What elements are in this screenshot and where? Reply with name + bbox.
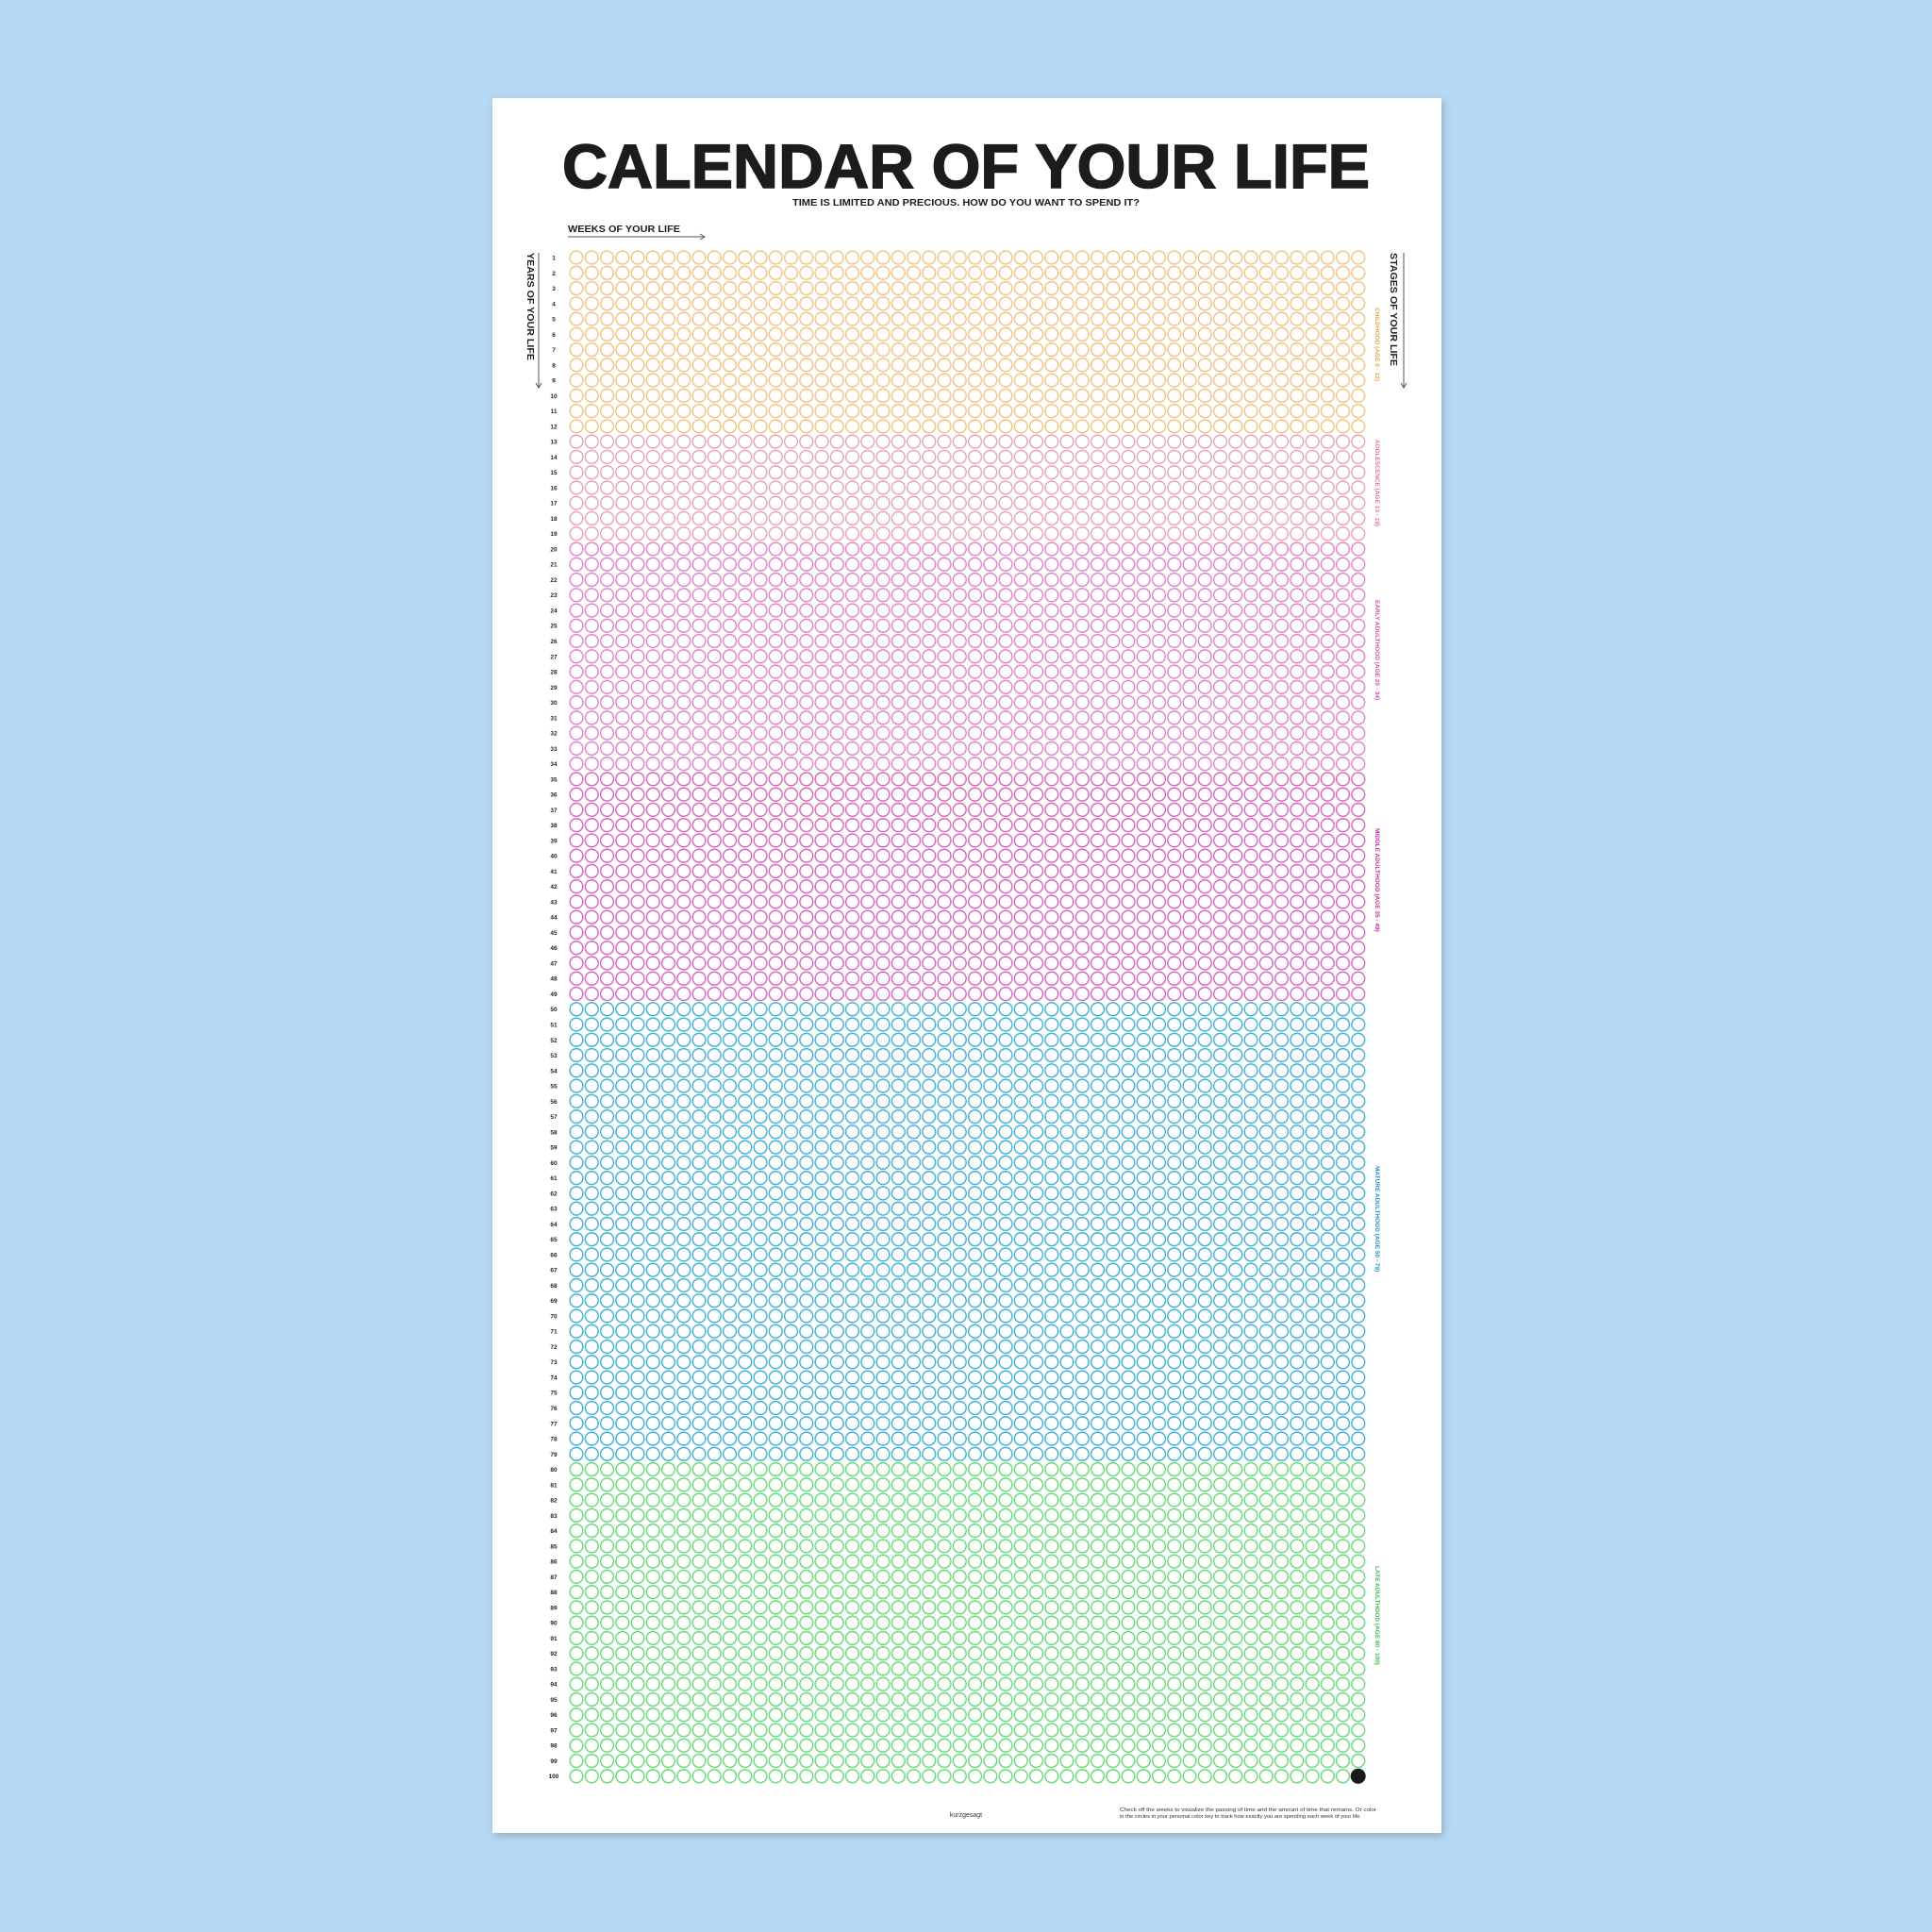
year numbers: 29 <box>550 685 558 691</box>
year numbers: 85 <box>550 1543 558 1550</box>
year numbers: 31 <box>550 715 558 722</box>
grid: late adulthood rows 80-100 <box>569 1461 1366 1784</box>
year numbers: 18 <box>550 516 558 523</box>
year numbers: 97 <box>550 1727 558 1734</box>
year numbers: 75 <box>550 1391 558 1397</box>
axis label: weeks <box>568 225 705 240</box>
year numbers: 46 <box>550 945 558 952</box>
year numbers: 70 <box>550 1313 558 1320</box>
year numbers: 20 <box>550 546 558 553</box>
year numbers: 81 <box>550 1482 558 1489</box>
year numbers: 90 <box>550 1621 558 1627</box>
year numbers: 5 <box>552 317 556 324</box>
year numbers: 23 <box>550 592 558 599</box>
year numbers: 61 <box>550 1175 558 1182</box>
year numbers: 79 <box>550 1452 558 1458</box>
year numbers: 39 <box>550 838 558 844</box>
year numbers: 47 <box>550 960 558 967</box>
axis label: years <box>525 253 541 388</box>
year numbers: 51 <box>550 1023 558 1029</box>
year numbers: 32 <box>550 731 558 738</box>
grid: middle adulthood rows 35-49 <box>569 772 1366 1002</box>
year numbers: 60 <box>550 1160 558 1167</box>
year numbers: 22 <box>550 577 558 584</box>
grid: mature adulthood rows 50-79 <box>569 1002 1366 1461</box>
year numbers: 10 <box>550 393 558 400</box>
year numbers: 11 <box>551 408 558 415</box>
year numbers: 21 <box>550 562 558 569</box>
year numbers: 24 <box>550 608 558 614</box>
year numbers: 45 <box>550 930 558 937</box>
year numbers: 93 <box>550 1666 558 1673</box>
year numbers: 40 <box>550 854 558 860</box>
year numbers: 89 <box>550 1605 558 1611</box>
year numbers: 26 <box>550 639 558 645</box>
axis label: stages: STAGES OF YOUR LIFE <box>1388 253 1398 366</box>
year numbers: 67 <box>550 1268 558 1274</box>
year numbers: 34 <box>550 761 558 768</box>
final week black dot <box>1351 1769 1366 1784</box>
year numbers: 44 <box>550 915 558 922</box>
year numbers: 64 <box>550 1222 558 1228</box>
year numbers: 27 <box>550 654 558 660</box>
year numbers: 56 <box>550 1099 558 1106</box>
year numbers: 28 <box>550 670 558 676</box>
year numbers: 35 <box>550 776 558 783</box>
label: adolescence: ADOLESCENCE (AGE 13 - 19) <box>1374 440 1380 526</box>
grid: childhood rows 1-12 <box>569 250 1366 434</box>
subtitle: TIME IS LIMITED AND PRECIOUS. HOW DO YOU WANT TO SPEND IT? <box>792 197 1140 208</box>
year numbers: 77 <box>550 1421 558 1427</box>
year numbers: 94 <box>550 1682 558 1689</box>
year numbers: 71 <box>550 1329 558 1336</box>
year numbers: 9 <box>552 378 556 385</box>
year numbers: 43 <box>550 899 558 906</box>
year numbers: 87 <box>550 1574 558 1581</box>
year numbers: 62 <box>550 1191 558 1197</box>
year numbers: 65 <box>550 1237 558 1243</box>
year numbers: 25 <box>550 624 558 630</box>
year numbers: 3 <box>552 286 556 292</box>
year numbers: 12 <box>550 424 558 430</box>
year numbers: 2 <box>552 271 556 277</box>
axis label: weeks: WEEKS OF YOUR LIFE <box>568 225 680 235</box>
grid: adolescence rows 13-19 <box>569 434 1366 541</box>
title: CALENDAR OF YOUR LIFE <box>562 131 1370 201</box>
year numbers: 8 <box>552 362 556 369</box>
year numbers: 88 <box>550 1590 558 1596</box>
year numbers: 78 <box>550 1437 558 1443</box>
year numbers: 57 <box>550 1114 558 1121</box>
year numbers: 80 <box>550 1467 558 1474</box>
year numbers: 38 <box>550 823 558 829</box>
year numbers: 4 <box>552 301 556 308</box>
year numbers: 83 <box>550 1513 558 1520</box>
year numbers: 14 <box>550 455 558 461</box>
year numbers: 53 <box>550 1053 558 1059</box>
year numbers: 36 <box>550 792 558 799</box>
year numbers: 13 <box>550 440 558 446</box>
year numbers: 1 <box>552 255 556 262</box>
year numbers: 50 <box>550 1007 558 1013</box>
footnote: Check off the weeks to visualize the passing of time and the amount of time that remains. Or color <box>1120 1807 1376 1813</box>
year numbers: 76 <box>550 1406 558 1412</box>
year numbers: 54 <box>550 1068 558 1074</box>
year numbers: 17 <box>550 501 558 508</box>
year numbers: 92 <box>550 1651 558 1657</box>
year numbers: 33 <box>550 746 558 753</box>
year numbers: 73 <box>550 1359 558 1366</box>
grid: early adulthood rows 20-34 <box>569 541 1366 772</box>
year numbers: 41 <box>550 869 558 875</box>
week grid <box>569 250 1366 1784</box>
stage labels <box>1374 308 1380 1665</box>
label: late adulthood: LATE ADULTHOOD (AGE 80 - 100) <box>1374 1566 1380 1665</box>
label: childhood: CHILDHOOD (AGE 0 - 12) <box>1374 308 1380 381</box>
year numbers: 100 <box>549 1774 559 1780</box>
year numbers: 19 <box>550 531 558 538</box>
year numbers: 6 <box>552 332 556 339</box>
axis label: years: YEARS OF YOUR LIFE <box>525 253 535 360</box>
year numbers: 96 <box>550 1712 558 1719</box>
poster sheet <box>492 98 1441 1833</box>
year numbers: 66 <box>550 1252 558 1258</box>
label: mature adulthood: MATURE ADULTHOOD (AGE 50 - 79) <box>1374 1166 1380 1272</box>
year numbers: 69 <box>550 1298 558 1305</box>
year numbers: 37 <box>550 808 558 814</box>
year numbers: 99 <box>550 1758 558 1765</box>
year numbers: 68 <box>550 1283 558 1290</box>
year numbers: 15 <box>550 470 558 476</box>
year numbers: 52 <box>550 1038 558 1044</box>
year numbers: 48 <box>550 976 558 983</box>
year numbers: 42 <box>550 884 558 891</box>
year numbers: 91 <box>550 1636 558 1642</box>
year numbers: 63 <box>550 1207 558 1213</box>
year numbers: 84 <box>550 1528 558 1535</box>
label: early adulthood: EARLY ADULTHOOD (AGE 20 - 34) <box>1374 600 1380 700</box>
year numbers: 30 <box>550 700 558 707</box>
label: middle adulthood: MIDDLE ADULTHOOD (AGE 35 - 49) <box>1374 828 1380 932</box>
year numbers: 49 <box>550 991 558 998</box>
year numbers: 59 <box>550 1145 558 1152</box>
year numbers: 55 <box>550 1084 558 1091</box>
year numbers: 98 <box>550 1743 558 1750</box>
year numbers: 86 <box>550 1559 558 1566</box>
footnote: in the circles in your personal color key to track how exactly you are spending each week of your life. <box>1120 1814 1361 1820</box>
year numbers: 7 <box>552 347 556 354</box>
axis label: stages <box>1388 253 1407 388</box>
year numbers: 82 <box>550 1498 558 1505</box>
brand: kurzgesagt <box>950 1812 982 1819</box>
year numbers: 95 <box>550 1697 558 1704</box>
year numbers: 16 <box>550 485 558 491</box>
year numbers: 72 <box>550 1344 558 1351</box>
year numbers: 58 <box>550 1129 558 1136</box>
year numbers: 74 <box>550 1374 558 1381</box>
